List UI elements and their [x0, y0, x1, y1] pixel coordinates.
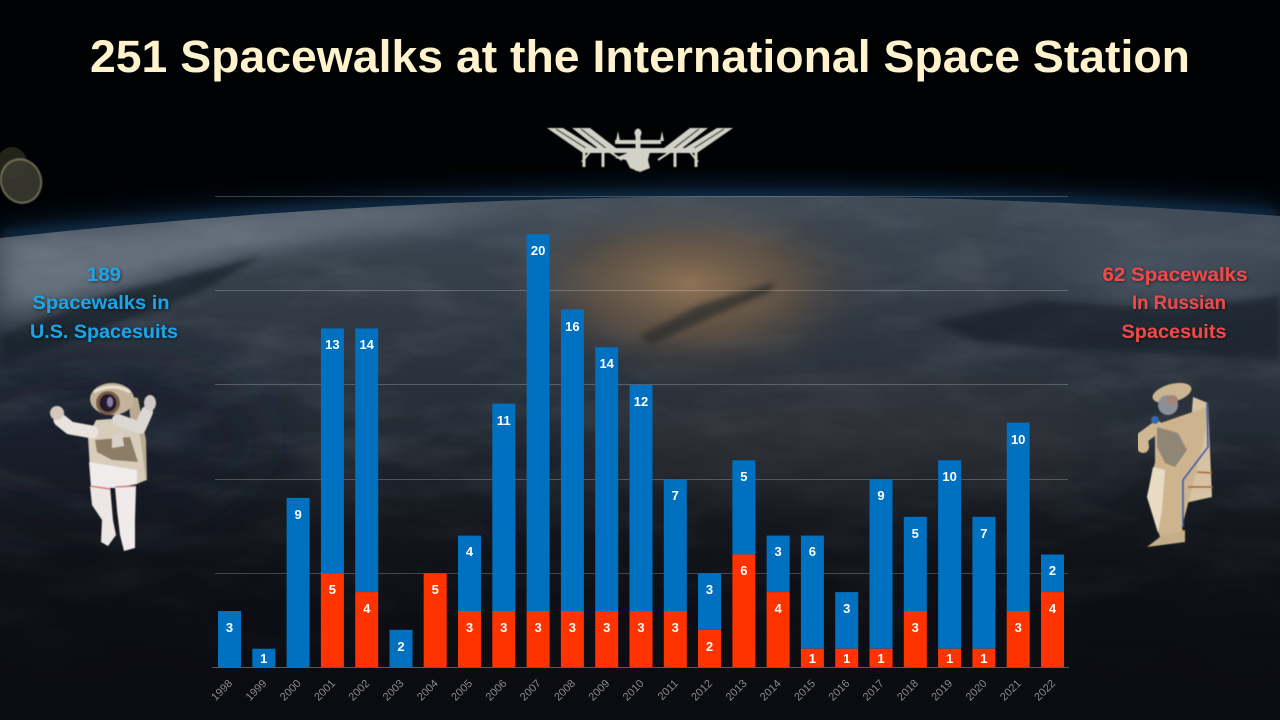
- bar: 2002: [355, 328, 378, 668]
- bar: 2009: 14: [599, 356, 615, 371]
- bar: 2000: 9: [294, 507, 302, 522]
- x axis year labels: 2003: [381, 678, 407, 703]
- x axis year labels: 2011: [656, 678, 681, 703]
- x axis year labels: 2017: [861, 678, 887, 703]
- bar: 2010: [630, 385, 652, 668]
- bar: 2013: [732, 460, 755, 668]
- gridlines: [215, 196, 1068, 574]
- icon: lens flare: [0, 147, 47, 209]
- bar: 2022: [1041, 554, 1064, 668]
- bar: 2020: 7: [980, 526, 988, 541]
- x axis year labels: 2013: [724, 678, 750, 703]
- x axis year labels: 2019: [929, 678, 955, 703]
- x axis year labels: 2022: [1032, 678, 1058, 703]
- x axis year labels: 1998: [209, 678, 235, 703]
- bar: 2006: 3: [500, 620, 507, 635]
- bar: 2003: [390, 630, 412, 668]
- bar: 2021: 10: [1011, 432, 1025, 447]
- bar: 2013: 6: [740, 563, 748, 578]
- bar: 2004: [424, 573, 447, 668]
- bar: 2008: 3: [569, 620, 576, 635]
- bar: 2010: 3: [637, 620, 645, 635]
- bar: 2015: 6: [809, 544, 816, 559]
- bar: 2022: 4: [1049, 601, 1057, 616]
- x axis year labels: 2001: [312, 678, 338, 703]
- x axis year labels: 2000: [278, 678, 304, 703]
- side label: U.S. spacesuits: [30, 265, 178, 343]
- bar: 2009: 3: [603, 620, 610, 635]
- x axis year labels: 2006: [484, 678, 509, 703]
- bar: 1999: 1: [260, 651, 267, 666]
- bar: 2018: 5: [912, 526, 919, 541]
- x axis year labels: 2009: [587, 678, 612, 703]
- bar: 2016: 1: [843, 651, 850, 666]
- x axis year labels: 2014: [758, 678, 784, 703]
- bar: 2003: 2: [397, 639, 405, 654]
- x axis year labels: 2018: [895, 678, 921, 703]
- bar: 2007: 3: [534, 620, 542, 635]
- x axis year labels: 2005: [449, 678, 475, 703]
- x axis year labels: 2010: [621, 678, 647, 703]
- bar: 2015: 1: [809, 651, 816, 666]
- side label: Russian spacesuits: [1102, 265, 1248, 343]
- bar: 2005: [458, 536, 481, 668]
- bar: 2011: 7: [672, 488, 679, 503]
- background: space and earth: [0, 171, 1280, 720]
- bar: 2005: 3: [466, 620, 473, 635]
- bar: 2012: 2: [706, 639, 713, 654]
- bar: 1998: [218, 611, 241, 668]
- side label: Russian spacesuits: Spacesuits: [1122, 322, 1226, 343]
- bar: 2001: 5: [329, 582, 336, 597]
- x axis year labels: 1999: [244, 678, 269, 703]
- bar: 1999: [252, 649, 275, 668]
- bar: 2021: [1007, 423, 1030, 668]
- x axis year labels: 2020: [964, 678, 990, 703]
- x axis year labels: 2007: [518, 678, 544, 703]
- bar: 2002: 4: [363, 601, 371, 616]
- bar: 2001: [321, 328, 344, 668]
- bar: 2020: [972, 517, 995, 668]
- bar: 2011: [664, 479, 687, 668]
- bar: 2022: 2: [1049, 563, 1056, 578]
- bar: 2016: [835, 592, 858, 668]
- stacked bar chart: [218, 234, 1064, 667]
- x axis year labels: 2021: [998, 678, 1024, 703]
- bar: 2001: 13: [325, 337, 340, 352]
- x axis year labels: 2004: [415, 678, 441, 703]
- bar: 2012: [698, 573, 721, 668]
- icon: astronaut in U.S. spacesuit: [50, 383, 156, 551]
- icon: space station: [547, 128, 733, 172]
- side label: Russian spacesuits: 62 Spacewalks: [1102, 265, 1248, 286]
- bar: 2008: 16: [565, 319, 580, 334]
- bar: 2014: 3: [774, 544, 782, 559]
- side label: U.S. spacesuits: U.S. Spacesuits: [30, 322, 178, 343]
- bar: 2019: 10: [942, 469, 957, 484]
- bar: 2019: 1: [946, 651, 953, 666]
- bar: 2006: [492, 404, 515, 668]
- bar: 2018: [904, 517, 927, 668]
- side label: U.S. spacesuits: 189: [87, 265, 121, 286]
- bar: 2007: [527, 234, 550, 667]
- bar: 2017: [870, 479, 892, 668]
- bar: 2008: [561, 310, 584, 668]
- x axis year labels: 2008: [552, 678, 578, 703]
- bar: 2005: 4: [466, 544, 474, 559]
- bar: 2009: [595, 347, 618, 668]
- side label: U.S. spacesuits: Spacewalks in: [32, 293, 170, 314]
- bar: 2002: 14: [359, 337, 375, 352]
- bar: 2004: 5: [432, 582, 439, 597]
- bar: 2018: 3: [912, 620, 919, 635]
- x axis year labels: [209, 678, 1058, 703]
- bar: 2010: 12: [634, 394, 648, 409]
- bar: 2017: 9: [877, 488, 885, 503]
- bar: 2014: 4: [774, 601, 782, 616]
- bar: 2017: 1: [877, 651, 885, 666]
- bar: 2011: 3: [672, 620, 679, 635]
- title: 251 Spacewalks at the International Space Station: [90, 31, 1190, 82]
- bar: 2015: [801, 536, 824, 668]
- bar: 2013: 5: [740, 469, 748, 484]
- x axis year labels: 2016: [827, 678, 852, 703]
- bar: 2020: 1: [980, 651, 988, 666]
- bar: 2016: 3: [843, 601, 850, 616]
- bar: 2021: 3: [1015, 620, 1022, 635]
- bar: 2012: 3: [706, 582, 713, 597]
- side label: Russian spacesuits: In Russian: [1132, 293, 1226, 314]
- bar: 1998: 3: [226, 620, 233, 635]
- chart baseline: [212, 666, 1069, 668]
- x axis year labels: 2002: [347, 678, 372, 703]
- x axis year labels: 2012: [689, 678, 715, 703]
- bar: 2007: 20: [531, 243, 545, 258]
- bar: 2000: [287, 498, 310, 668]
- bar: 2019: [938, 460, 961, 668]
- bar: 2014: [767, 536, 790, 668]
- x axis year labels: 2015: [792, 678, 818, 703]
- icon: astronaut in Russian spacesuit: [1142, 379, 1213, 547]
- bar: 2006: 11: [497, 413, 511, 428]
